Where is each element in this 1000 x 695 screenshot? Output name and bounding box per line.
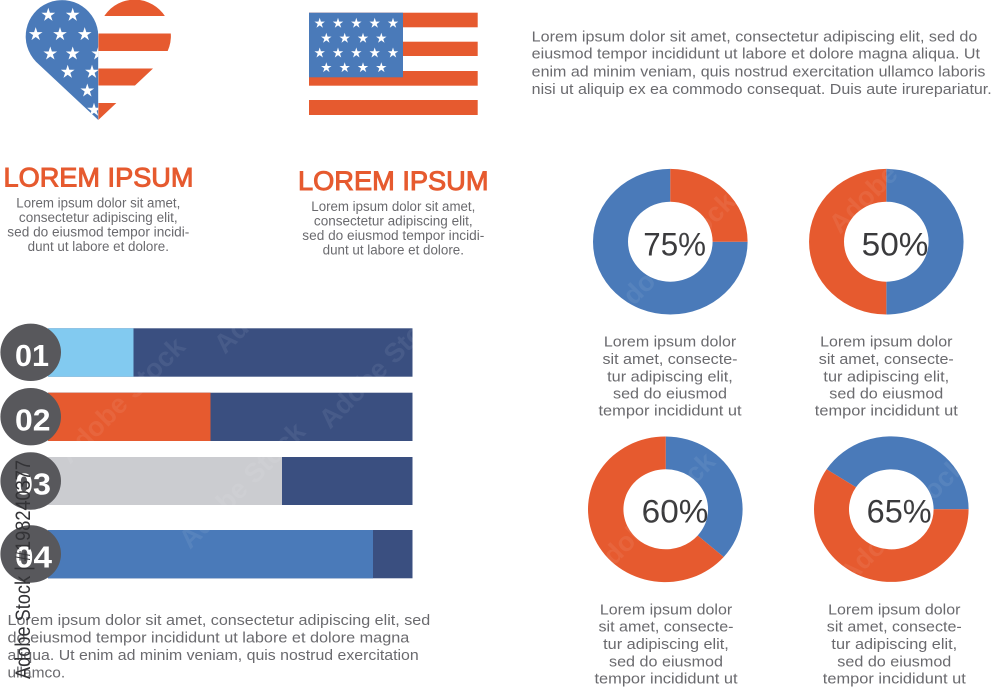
caption: 65% donut: sit amet, consecte- [827, 619, 962, 636]
flag stripes [309, 13, 478, 115]
text block: bottom paragraph: aliqua. Ut enim ad minim veniam, quis nostrud exercitation [8, 647, 419, 664]
text block: intro paragraph: eiusmod tempor incididunt ut labore et dolore magna aliqua. Ut [532, 46, 981, 63]
caption: 75% donut: Lorem ipsum dolor [604, 334, 736, 351]
text block: center description: sed do eiusmod tempor incidi- [302, 228, 484, 243]
text block: left description: sed do eiusmod tempor incidi- [7, 225, 189, 240]
caption: 50% donut: tur adipiscing elit, [823, 368, 949, 385]
text block: intro paragraph: enim ad minim veniam, quis nostrud exercitation ullamco laboris [532, 63, 985, 80]
caption: 75% donut: sit amet, consecte- [602, 351, 738, 368]
text block: intro paragraph: nisi ut aliquip ex ea commodo consequat. Duis aute irurepariatur. [532, 81, 992, 98]
donut chart: 75% [593, 169, 748, 315]
caption: 65% donut: tur adipiscing elit, [831, 636, 957, 653]
caption: 75% donut [598, 334, 742, 420]
watermark: diagonal stock text [53, 101, 972, 589]
bar chart: numbered progress bars [0, 324, 413, 583]
caption: 50% donut [815, 334, 959, 420]
bar 02: 02 [15, 404, 50, 438]
bar 04: 04 [15, 540, 52, 574]
caption: 50% donut: Lorem ipsum dolor [820, 334, 952, 351]
caption: 50% donut: sit amet, consecte- [819, 351, 954, 368]
caption: 75% donut: sed do eiusmod [613, 386, 727, 403]
text block: intro paragraph [532, 29, 992, 98]
caption: 60% donut: sed do eiusmod [609, 653, 723, 670]
caption: 75% donut: tempor incididunt ut [598, 403, 742, 420]
watermark: diagonal stock text: Adobe Stock [833, 451, 972, 589]
watermark: diagonal stock text: Adobe Stock [173, 416, 312, 554]
watermark: diagonal stock text: Adobe Stock [823, 101, 962, 239]
caption: 60% donut: tur adipiscing elit, [603, 636, 729, 653]
text block: left description: consectetur adipiscing elit, [19, 210, 178, 225]
text block: bottom paragraph: Lorem ipsum dolor sit amet, consectetur adipiscing elit, sed [8, 612, 430, 629]
caption: 65% donut [823, 601, 967, 687]
donut chart: 65%: 65% [867, 494, 932, 530]
bar 02 [0, 388, 413, 445]
caption: 50% donut: tempor incididunt ut [815, 403, 959, 420]
bar 01: 01 [15, 339, 49, 373]
icon: american flag [309, 13, 478, 115]
donut chart: 60%: 60% [642, 494, 708, 530]
caption: 50% donut: sed do eiusmod [829, 386, 943, 403]
donut chart: 65% [814, 436, 969, 582]
bar 04 [0, 525, 413, 583]
watermark: diagonal stock text: Adobe Stock [583, 446, 722, 584]
text block: left description: Lorem ipsum dolor sit amet, [16, 195, 180, 210]
caption: 65% donut: Lorem ipsum dolor [828, 601, 960, 618]
donut chart: 60% [588, 436, 743, 582]
text block: bottom paragraph: ullamco. [8, 664, 65, 681]
text block: center description [302, 199, 484, 257]
caption: 60% donut: tempor incididunt ut [594, 670, 738, 687]
flag canton with stars [309, 13, 403, 77]
caption: 60% donut [594, 601, 738, 687]
watermark: diagonal stock text: Adobe Stock [603, 186, 742, 324]
text block: intro paragraph: Lorem ipsum dolor sit amet, consectetur adipiscing elit, sed do [532, 29, 977, 46]
text block: center description: dunt ut labore et dolore. [323, 242, 464, 257]
bar 01 [0, 324, 413, 381]
bar 03: 03 [15, 468, 51, 502]
text block: center description: Lorem ipsum dolor sit amet, [311, 199, 475, 214]
heart blue half with stars [26, 0, 98, 120]
icon: heart flag [20, 0, 173, 121]
watermark: diagonal stock text: Adobe Stock [53, 331, 192, 469]
caption: 75% donut: tur adipiscing elit, [607, 368, 733, 385]
heart orange stripes [98, 0, 173, 120]
heading: left lorem ipsum: LOREM IPSUM [4, 163, 194, 193]
watermark: vertical stock id: Adobe Stock | #198240377 [12, 460, 35, 679]
donut chart: 50%: 50% [862, 226, 928, 262]
text block: left description [7, 195, 189, 254]
text block: left description: dunt ut labore et dolore. [28, 239, 169, 254]
text block: center description: consectetur adipiscing elit, [314, 214, 473, 229]
text block: bottom paragraph: do eiusmod tempor incididunt ut labore et dolore magna [8, 629, 410, 646]
caption: 65% donut: sed do eiusmod [837, 653, 951, 670]
caption: 60% donut: Lorem ipsum dolor [600, 601, 732, 618]
caption: 60% donut: sit amet, consecte- [598, 619, 734, 636]
heading: center lorem ipsum: LOREM IPSUM [298, 166, 488, 196]
donut chart: 50% [809, 169, 964, 314]
bar 03 [0, 452, 413, 510]
donut chart: 75%: 75% [643, 226, 706, 262]
caption: 65% donut: tempor incididunt ut [823, 670, 967, 687]
watermark: diagonal stock text: Adobe Stock [313, 296, 452, 434]
text block: bottom paragraph [8, 612, 430, 681]
watermark: diagonal stock text: Adobe Stock [208, 221, 347, 359]
